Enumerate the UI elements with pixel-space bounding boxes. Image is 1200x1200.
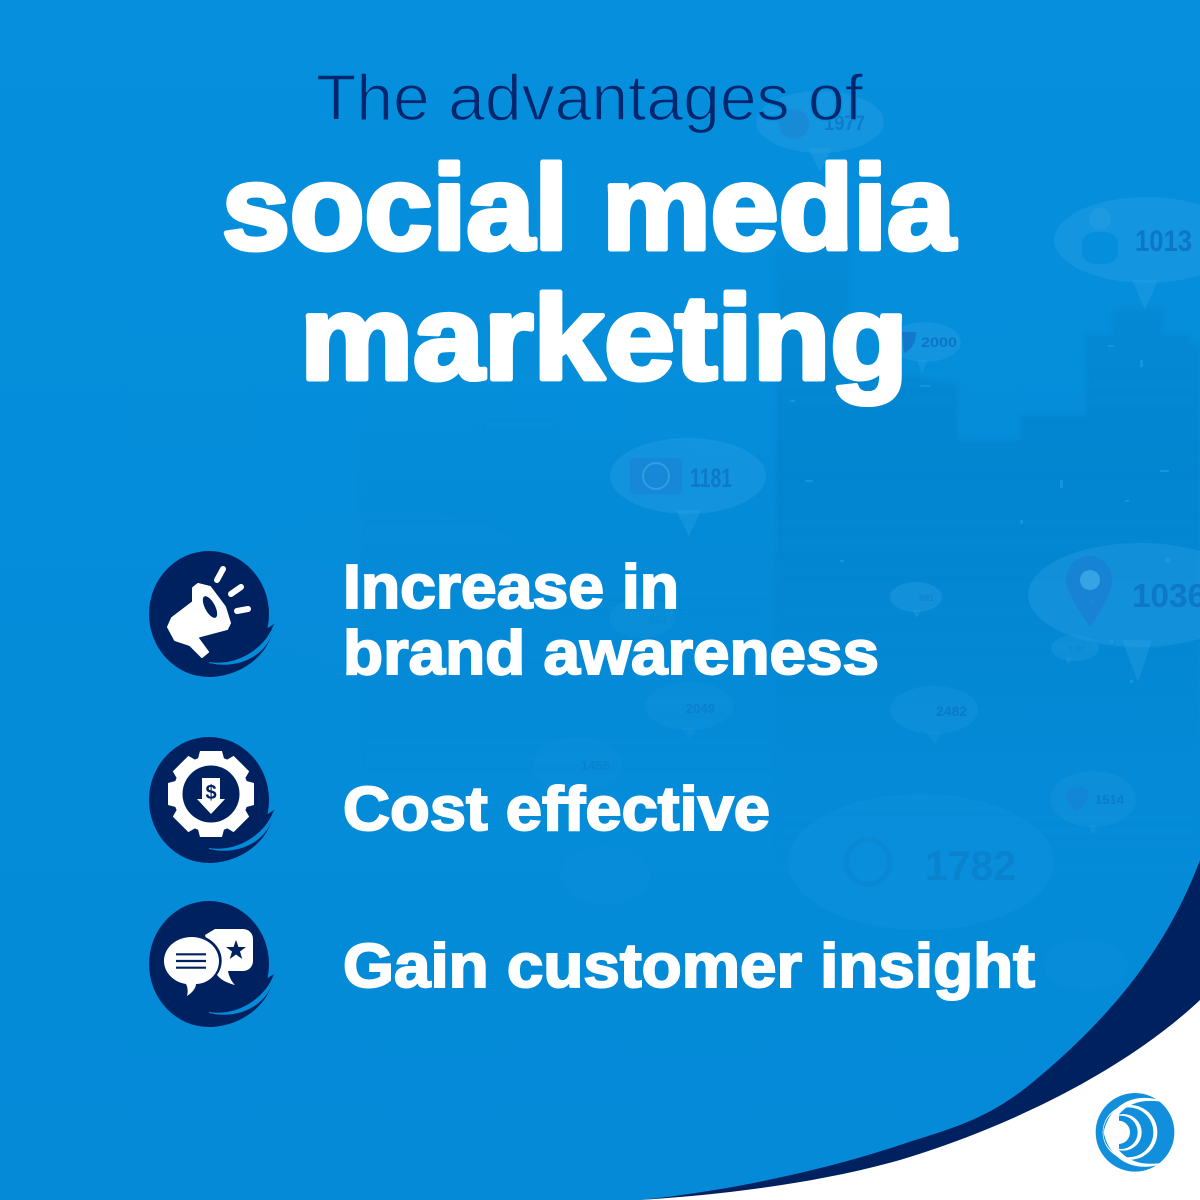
bubble 2482: 2482 <box>936 703 967 719</box>
speech bubbles background <box>230 91 1200 991</box>
navy swoosh corner <box>640 860 1200 1200</box>
benefit text: Cost effective: Cost effective <box>343 775 770 844</box>
bubble 1514: 1514 <box>1095 792 1125 807</box>
bubble 2049: 2049 <box>686 701 715 716</box>
bubble 1036 <box>1028 543 1200 682</box>
bubble 1782 large <box>788 794 1054 930</box>
icon: megaphone <box>149 551 274 677</box>
bubble 991 <box>890 582 942 618</box>
bubble 1977: 1977 <box>824 112 865 135</box>
bubble 2049 <box>645 682 733 742</box>
bubble 1013: 1013 <box>1135 225 1192 258</box>
title: marketing: marketing <box>300 271 908 405</box>
bubble 1782 small: 1782 <box>1069 646 1085 653</box>
benefit text: Gain customer insight: Gain customer insight <box>343 932 1035 1001</box>
icon: gear with dollar arrow <box>149 737 274 863</box>
bubble 1514 <box>1050 771 1136 835</box>
bubble 1181 <box>610 438 766 536</box>
bubble 2000 <box>889 322 961 373</box>
bubble 1596 <box>560 845 650 905</box>
bubble 1013 <box>1054 197 1200 310</box>
logo <box>1096 1093 1174 1172</box>
bubble 921 <box>609 598 675 638</box>
city skyline background <box>778 345 1198 683</box>
bubble 921: 921 <box>649 614 667 626</box>
bubble 1455 <box>533 737 623 793</box>
bubble 1977 <box>756 91 884 172</box>
title: The advantages of: The advantages of <box>316 61 864 134</box>
bubble 1181: 1181 <box>690 463 732 493</box>
bubble 991: 991 <box>919 593 934 603</box>
bubble 1782 small <box>1051 635 1099 666</box>
icon: gear with dollar arrow: $ <box>205 782 217 804</box>
bubble 1455: 1455 <box>581 758 610 773</box>
benefit text: Increase in: Increase in <box>343 553 679 622</box>
bubble 2000: 2000 <box>921 334 957 350</box>
bubble faint right <box>1044 939 1128 991</box>
bubble 1782 large: 1782 <box>925 842 1016 889</box>
bubble faint left large <box>230 510 550 670</box>
bubble 2482 <box>890 686 978 744</box>
benefit text: brand awareness: brand awareness <box>343 619 879 688</box>
title: social media: social media <box>222 141 956 275</box>
white corner <box>640 1000 1200 1200</box>
icon: chat bubbles with star <box>149 901 274 1027</box>
